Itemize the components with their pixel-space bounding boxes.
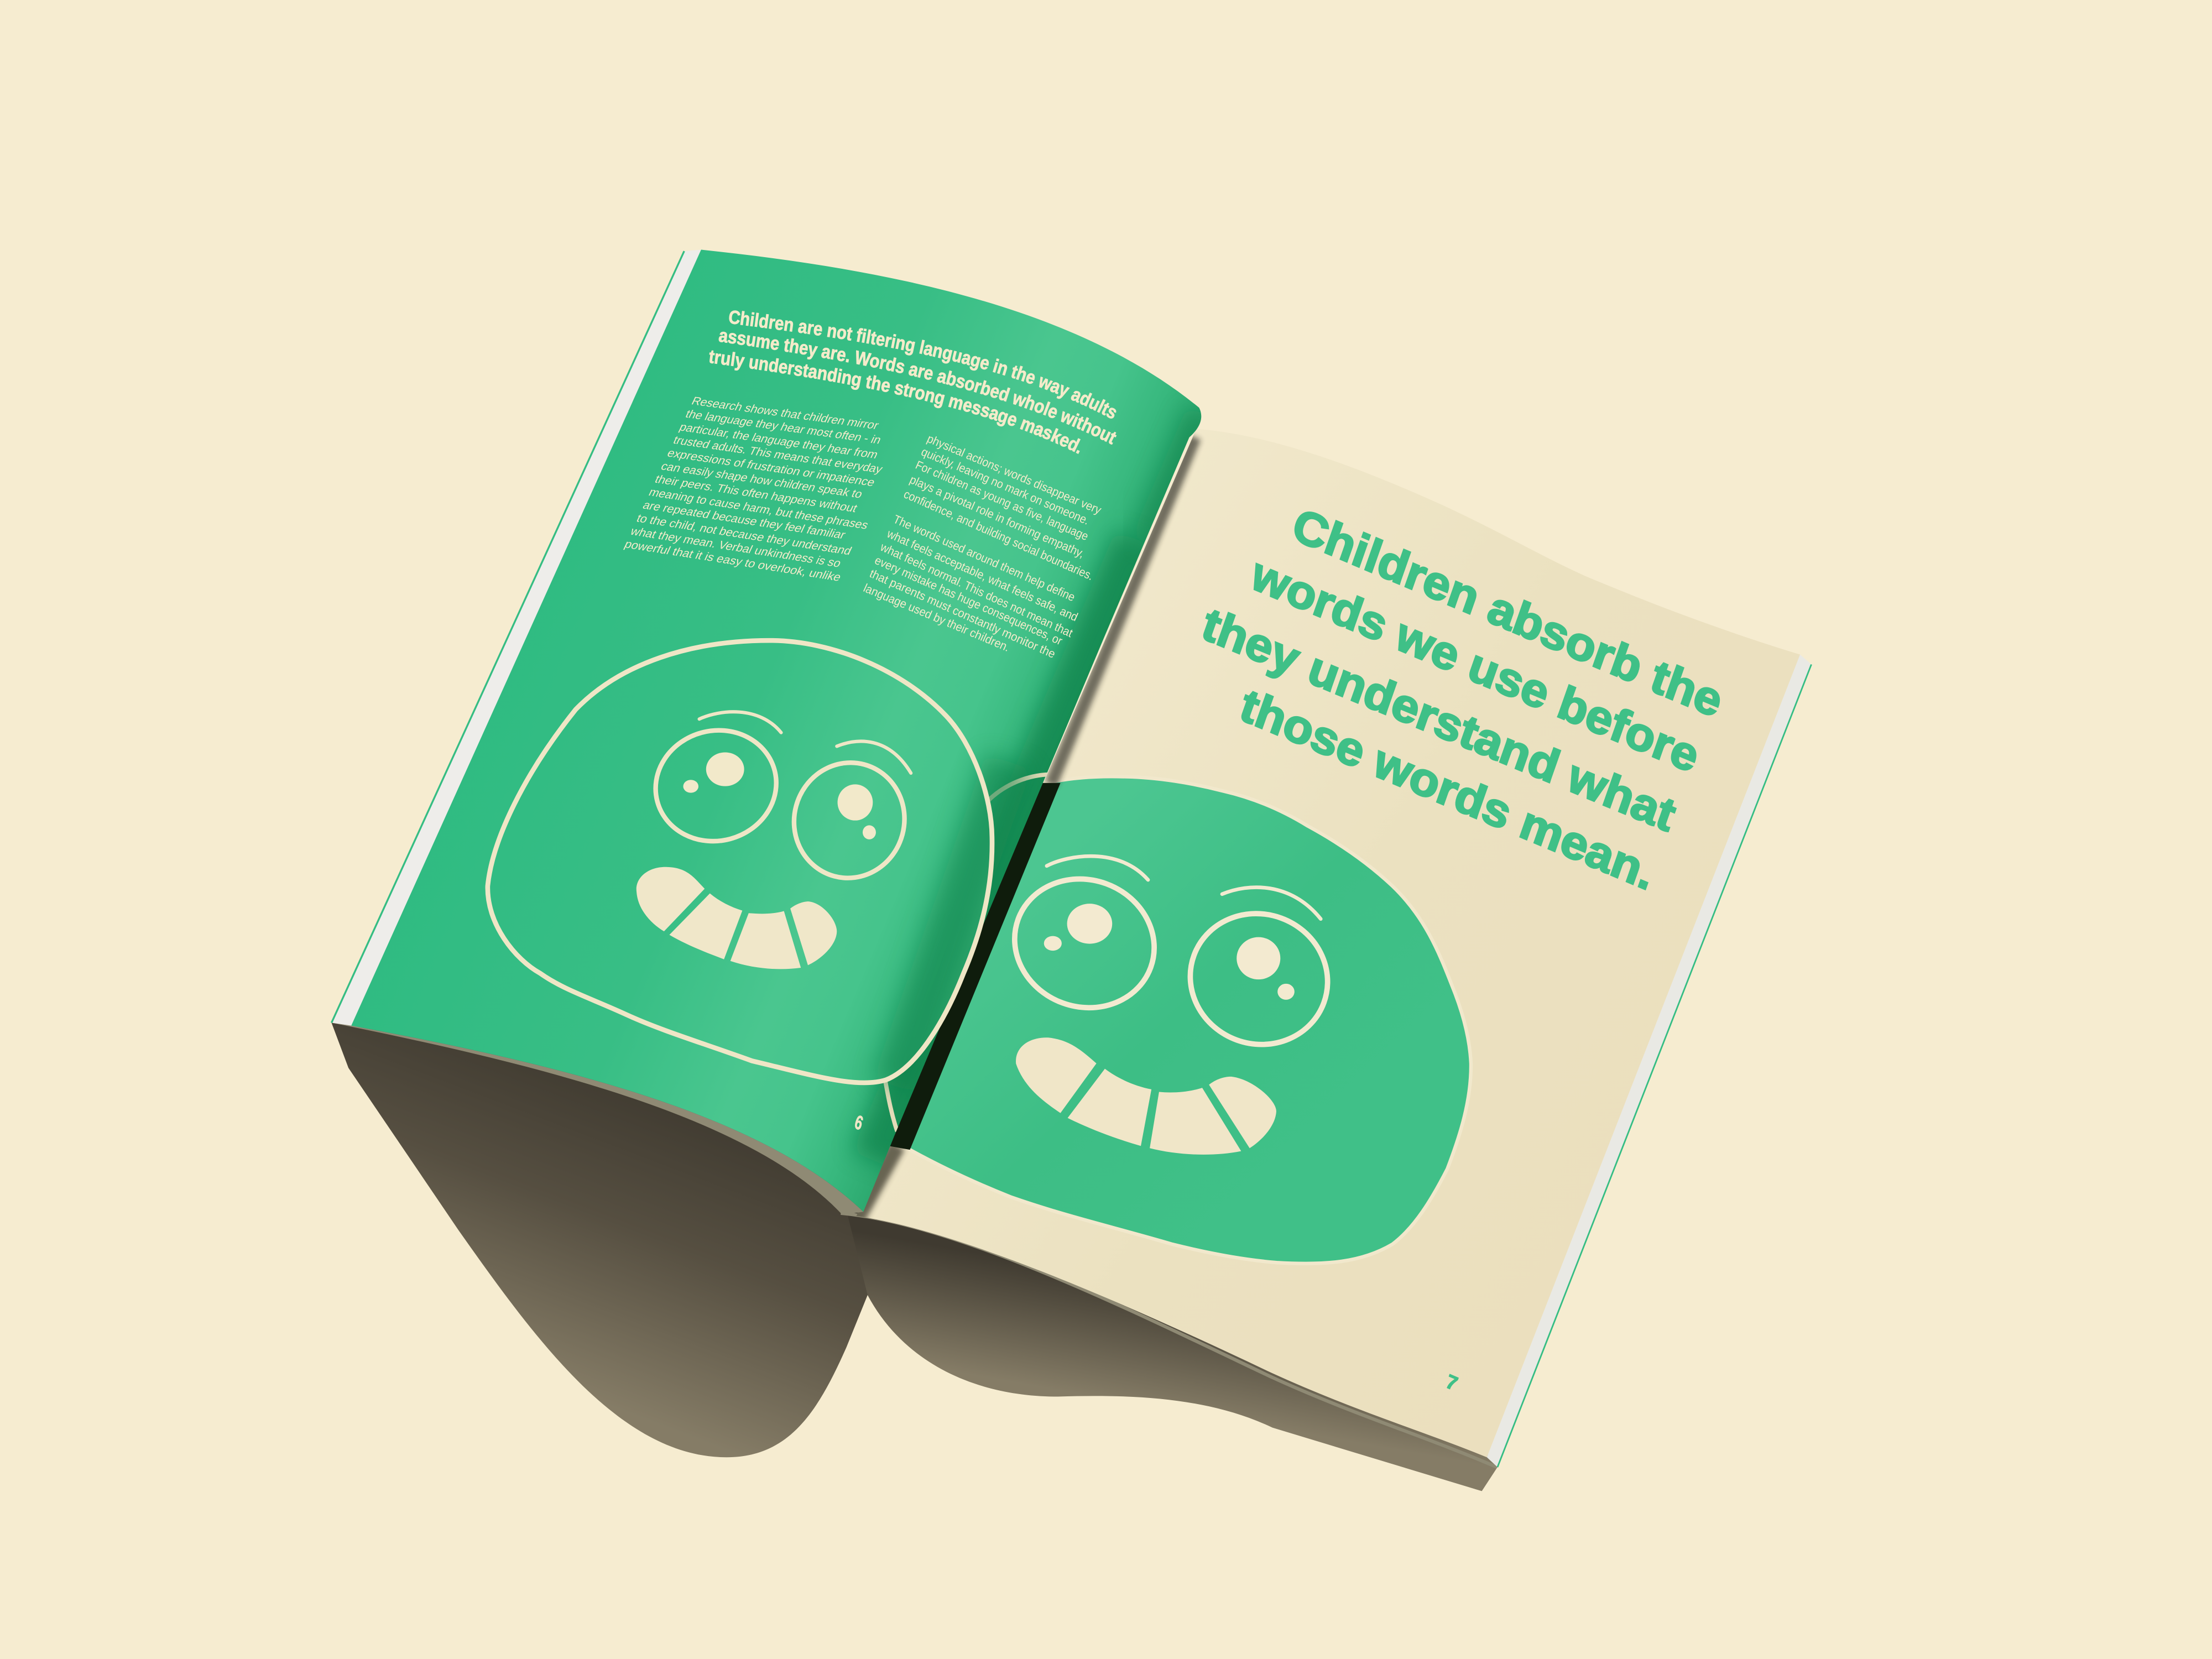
teeth <box>637 867 837 969</box>
monster outline <box>488 640 992 1083</box>
page block left fore-edge <box>331 250 701 1026</box>
body column two: what feels acceptable, what feels safe, and <box>885 526 1080 624</box>
cover edge <box>1498 665 1812 1467</box>
intro paragraph: Children are not filtering language in the way adults <box>729 310 1116 419</box>
body column one: trusted adults. This means that everyday <box>671 433 885 476</box>
body column two <box>862 431 1104 661</box>
body column one: Research shows that children mirror <box>690 394 881 432</box>
book cast shadow: left page <box>331 1022 881 1457</box>
magazine spread mockup <box>331 250 1812 1491</box>
body column one: to the child, not because they understand <box>634 512 854 557</box>
body column one: meaning to cause harm, but these phrases <box>647 486 871 531</box>
body column two: that parents must constantly monitor the <box>868 566 1058 661</box>
book cast shadow: right page <box>847 1211 1498 1491</box>
monster spine shading <box>896 762 1009 1086</box>
body column two: plays a pivotal role in forming empathy, <box>907 472 1087 560</box>
headline <box>1196 498 1729 900</box>
headline: Children absorb the <box>1286 498 1729 727</box>
headline: those words mean. <box>1234 679 1662 900</box>
left monster <box>488 640 1009 1086</box>
page number 7: 7 <box>1443 1370 1460 1395</box>
body column one: particular, the language they hear from <box>677 420 880 461</box>
body column one: expressions of frustration or impatience <box>665 446 878 489</box>
body column two: quickly, leaving no mark on someone. <box>919 445 1092 528</box>
headline: they understand what <box>1196 597 1682 841</box>
spine shading <box>881 543 1145 1164</box>
eyebrows <box>700 712 911 773</box>
teeth <box>1016 1037 1276 1155</box>
right eye <box>781 750 917 890</box>
body column one: can easily shape how children speak to <box>659 460 865 500</box>
body column two: The words used around them help define <box>891 512 1077 604</box>
right monster <box>895 776 1471 1264</box>
fore-edge pages <box>1487 655 1812 1467</box>
left cover edge <box>331 251 684 1022</box>
monster line <box>488 640 992 1083</box>
page stack edge <box>841 1213 1497 1467</box>
gutter shadow <box>1051 437 1195 784</box>
gutter shadow lower <box>855 1145 897 1222</box>
right eye <box>1188 911 1331 1047</box>
left eye <box>1012 876 1157 1011</box>
body column one: are repeated because they feel familiar <box>641 498 848 541</box>
top spine shading <box>1145 412 1202 543</box>
page number 6: 6 <box>852 1111 865 1135</box>
left eye <box>643 717 789 854</box>
body column two: For children as young as five, language <box>914 458 1091 543</box>
body column two: language used by their children. <box>862 581 1012 654</box>
gutter black band <box>886 783 1061 1150</box>
body column one: their peers. This often happens without <box>653 472 859 515</box>
body column one: powerful that it is easy to overlook, unlike <box>622 538 843 583</box>
body column two: what feels normal. This does not mean that <box>878 540 1075 640</box>
panel: right page <box>856 429 1812 1467</box>
headline: words we use before <box>1245 547 1706 782</box>
body column one <box>622 394 885 583</box>
eyebrows <box>1047 856 1321 919</box>
outline of right monster continuing on left page <box>884 775 1048 1131</box>
intro paragraph: assume they are. Words are absorbed whole without <box>719 332 1117 445</box>
body column two: every mistake has huge consequences, or <box>873 553 1065 648</box>
body column two: physical actions; words disappear very <box>925 431 1104 517</box>
monster halo and body <box>895 776 1471 1264</box>
body column one: what they mean. Verbal unkindness is so <box>628 524 843 570</box>
panel: left page <box>351 250 1201 1212</box>
intro paragraph: truly understanding the strong message masked. <box>709 351 1081 454</box>
body column two: confidence, and building social boundaries. <box>902 487 1095 583</box>
body column one: the language they hear most often - in <box>684 407 884 446</box>
left page bottom edge <box>331 1022 863 1214</box>
